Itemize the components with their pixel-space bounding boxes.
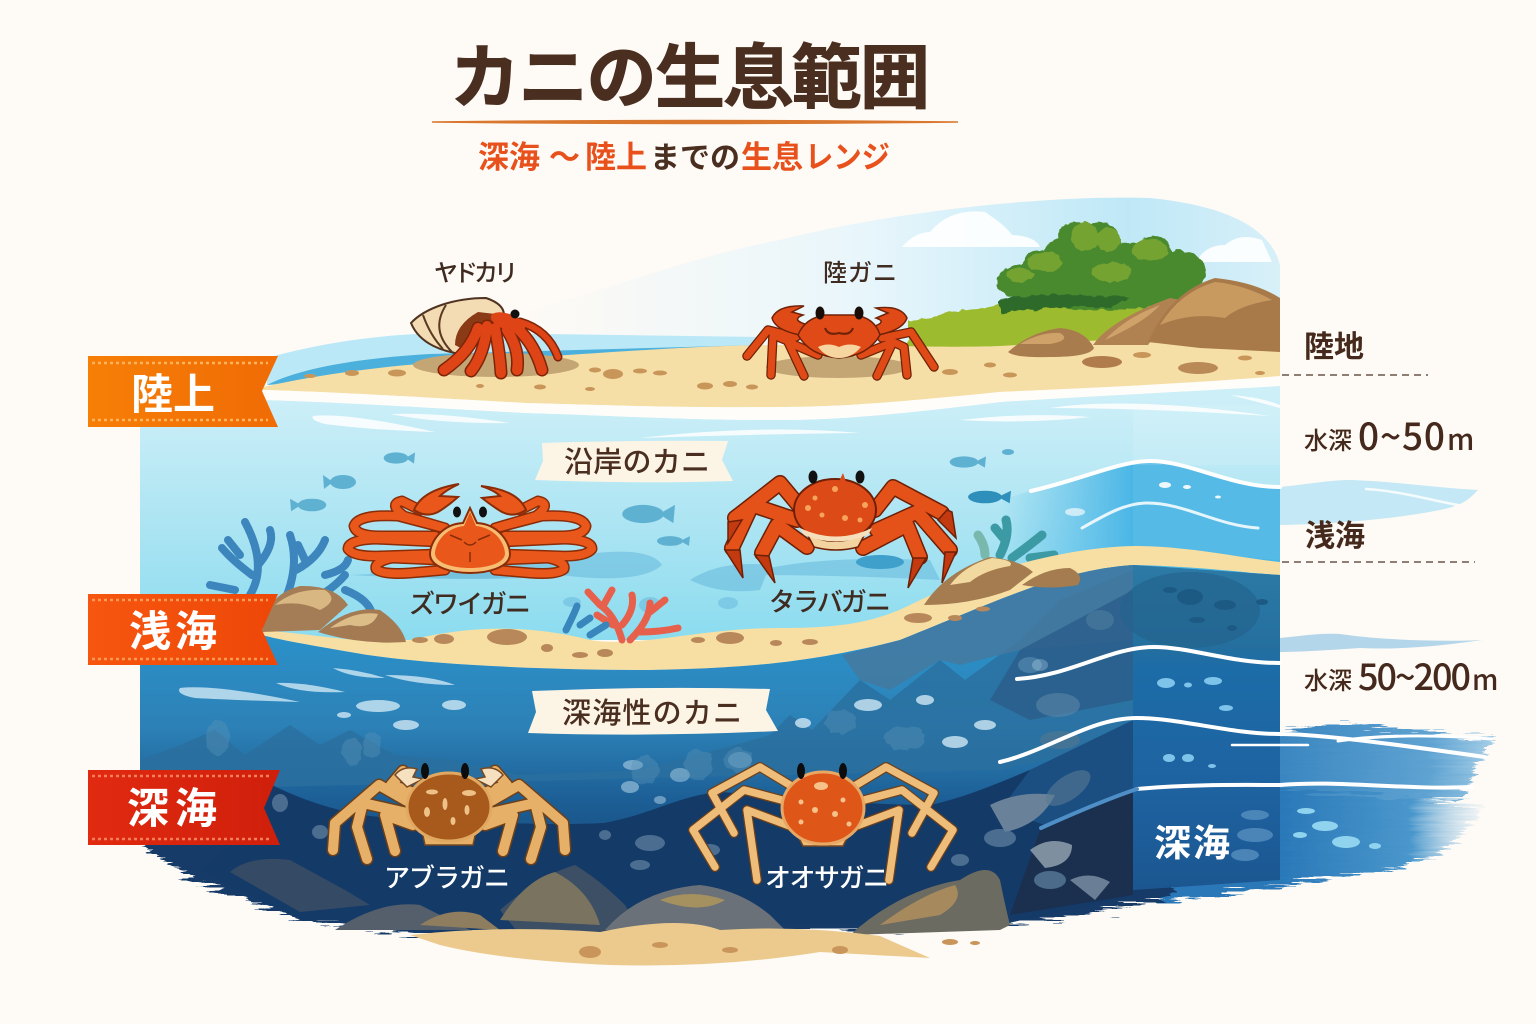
label: hermit crab: ヤドカリ	[434, 253, 518, 288]
deep water	[140, 565, 1280, 860]
ribbon: land: 陸上	[131, 361, 215, 422]
depth label: shallow: 浅海	[1305, 511, 1365, 555]
bottom sand	[410, 923, 980, 965]
right extended water bands	[1160, 480, 1494, 902]
dashed line land	[1282, 374, 1428, 376]
crab: hermit	[411, 298, 579, 377]
badge: deep crabs: 深海性のカニ	[562, 690, 742, 732]
badge: coastal crabs: 沿岸のカニ	[564, 439, 710, 481]
deep bottom rough edge	[143, 835, 1280, 936]
ribbon: deep sea	[88, 770, 280, 845]
mid mountains	[140, 570, 1133, 790]
depth label: 0-50m: m	[1447, 417, 1474, 459]
seabed shadows	[350, 552, 940, 613]
title: カニの生息範囲	[450, 22, 930, 123]
sky	[526, 198, 1280, 360]
deep rocks	[230, 859, 1010, 935]
right column overlay	[1120, 405, 1280, 890]
blue coral small	[566, 606, 606, 635]
label: king crab: タラバガニ	[769, 582, 891, 619]
scene: habitat cross-section	[140, 198, 1494, 965]
subtitle: 〜	[549, 132, 580, 177]
depth label: land: 陸地	[1304, 322, 1364, 366]
sand pebbles seabed	[412, 606, 990, 658]
depth label: 50-200m: 水深	[1304, 661, 1352, 696]
seabed rocks left	[262, 586, 406, 643]
ribbon: shallow sea: 浅海	[129, 598, 217, 659]
depth label: 50-200m: 50~200	[1358, 649, 1471, 701]
label: snow crab: ズワイガニ	[409, 584, 531, 621]
right side brighter water	[1000, 461, 1280, 590]
land sand	[263, 330, 1280, 407]
depth label: 50-200m	[1304, 649, 1498, 701]
label: deep sea on column: 深海	[1154, 813, 1230, 867]
seabed shadow spot	[856, 555, 904, 569]
ribbon: shallow sea	[88, 594, 278, 665]
red coral	[588, 590, 678, 640]
wave lines	[1000, 461, 1492, 828]
seabed sand	[262, 546, 1280, 670]
badge: deep crabs	[528, 688, 778, 735]
title underline	[432, 120, 958, 124]
crab: osagani	[693, 763, 953, 880]
subtitle: 深海	[478, 132, 540, 177]
column water	[1133, 463, 1280, 560]
label: land crab: 陸ガニ	[823, 253, 897, 288]
crab: king crab	[725, 470, 956, 588]
shoreline water strip	[267, 333, 760, 385]
blue coral	[210, 522, 372, 615]
clouds	[902, 211, 1272, 262]
ribbon: deep sea: 深海	[127, 775, 217, 836]
fish	[290, 449, 1014, 546]
dashed line shallow	[1282, 561, 1475, 563]
mid-water mottled patches	[206, 710, 925, 784]
dark slope texture right	[990, 590, 1133, 915]
white foam line	[263, 376, 1280, 420]
subtitle: レンジ	[805, 132, 890, 177]
upper water highlights	[312, 395, 1280, 438]
subtitle: 生息	[741, 132, 803, 177]
ribbon: land	[88, 356, 278, 427]
deep blobs	[272, 794, 1066, 889]
depth label: 0-50m: 水深	[1304, 421, 1352, 456]
dark seabed layer	[200, 735, 1133, 925]
subtitle	[478, 132, 890, 177]
deep water highlights	[179, 659, 1048, 804]
subtitle: 陸上	[585, 132, 647, 177]
label: osagani: オオサガニ	[765, 858, 889, 895]
label: aburagani: アブラガニ	[384, 858, 510, 895]
teal coral	[978, 520, 1054, 558]
subtitle: までの	[650, 133, 740, 177]
column bubbles	[1065, 482, 1221, 516]
crab: aburagani	[333, 763, 565, 859]
land rocks	[1008, 278, 1280, 357]
bushes and trees	[908, 222, 1206, 350]
crab: snow crab	[348, 484, 592, 579]
crab: land crab	[747, 306, 934, 378]
seabed rocks right	[924, 557, 1080, 605]
depth label: 50-200m: m	[1472, 659, 1498, 699]
depth label: 0-50m	[1304, 407, 1474, 461]
depth label: 0-50m: 0~50	[1358, 407, 1445, 461]
shallow water	[140, 386, 1280, 640]
sand pebbles land	[304, 352, 1265, 391]
upper slope grey band	[842, 565, 1133, 690]
